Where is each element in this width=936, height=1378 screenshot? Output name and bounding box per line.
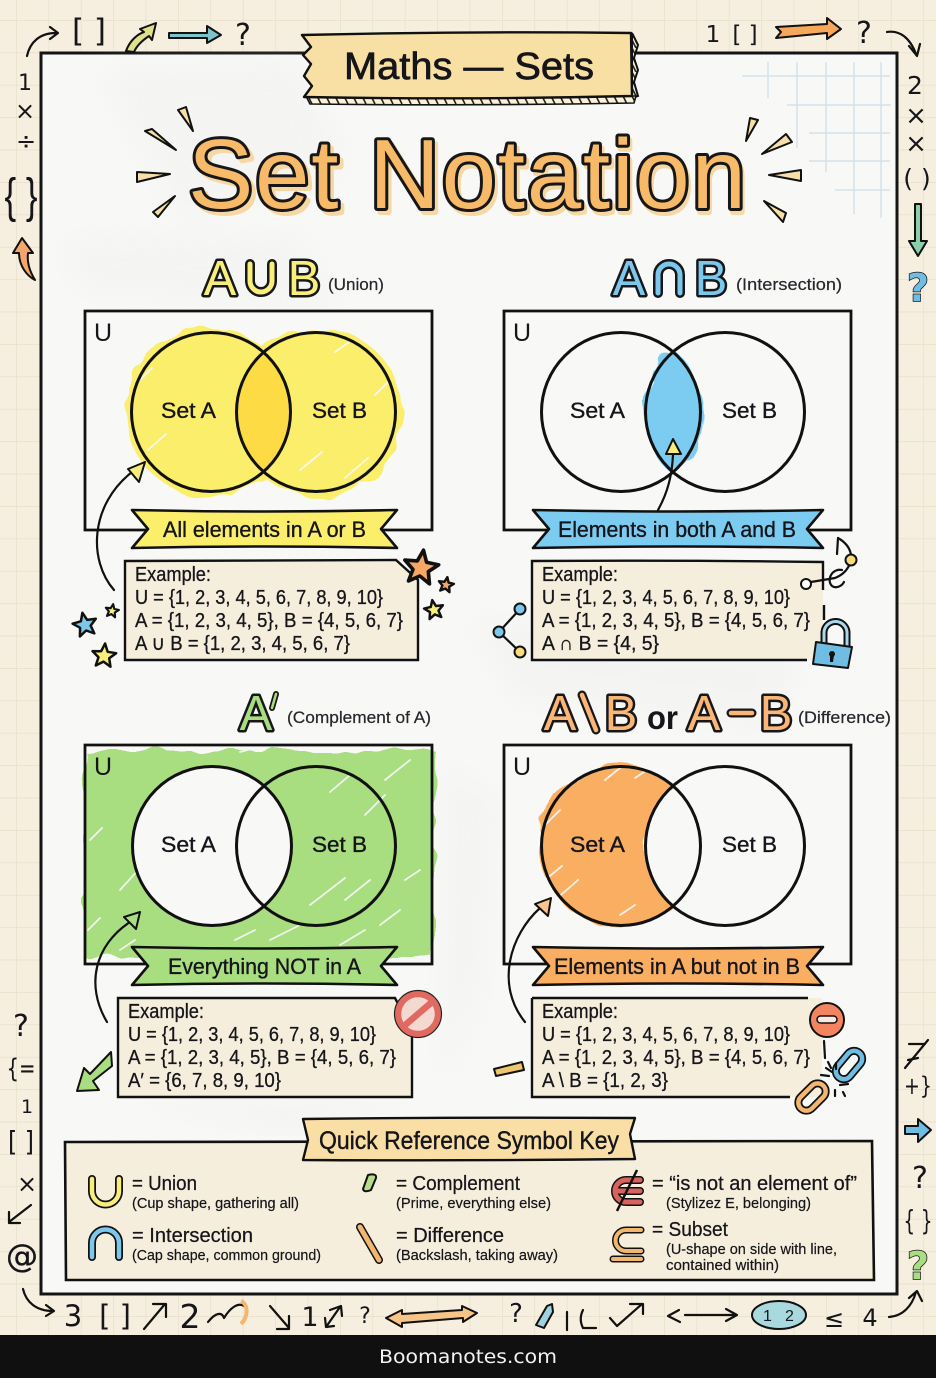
example box: union: U = {1, 2, 3, 4, 5, 6, 7, 8, 9, 10} bbox=[135, 587, 383, 609]
key: not an element of: = “is not an element of” bbox=[652, 1173, 857, 1195]
panel: difference venn bbox=[504, 745, 851, 1022]
panel: union venn: U bbox=[94, 319, 112, 347]
decoration: left margin symbols: 1 bbox=[18, 71, 32, 96]
union fill bbox=[125, 328, 402, 496]
decoration: left margin symbols bbox=[4, 71, 38, 280]
decoration: lower left margin symbols: @ bbox=[6, 1237, 38, 1275]
icon: network nodes left bbox=[494, 604, 526, 658]
example box: difference: A \ B = {1, 2, 3} bbox=[542, 1070, 668, 1092]
panel: difference venn: Set A bbox=[570, 832, 625, 857]
key: union: = Union bbox=[132, 1173, 197, 1195]
decoration: bottom margin symbols bbox=[23, 1289, 922, 1336]
example box: union: A ∪ B = {1, 2, 3, 4, 5, 6, 7} bbox=[135, 633, 350, 655]
footer bar bbox=[0, 1335, 936, 1378]
example box: intersection: Example: bbox=[542, 564, 618, 586]
panel: complement venn: U bbox=[94, 753, 112, 781]
example box: intersection: A = {1, 2, 3, 4, 5}, B = {4, 5, 6, 7} bbox=[542, 610, 810, 632]
heading: A minus B bbox=[544, 687, 891, 741]
decoration: bottom margin symbols: [ ] bbox=[99, 1299, 131, 1333]
decoration: lower left margin symbols: ? bbox=[13, 1009, 29, 1044]
key: not an element of: (Stylizez E, belonging) bbox=[666, 1195, 811, 1212]
heading: A intersection B: B bbox=[695, 252, 727, 306]
caption: Intersection: (Intersection) bbox=[736, 275, 842, 294]
decoration: top right margin symbols: 1 bbox=[706, 22, 720, 48]
decoration: lower left margin symbols bbox=[6, 1009, 38, 1275]
corner grid decoration bbox=[742, 62, 891, 218]
panel: difference venn: Set B bbox=[722, 832, 777, 857]
panel: intersection venn bbox=[504, 311, 851, 548]
key title banner: Quick Reference Symbol Key bbox=[319, 1127, 619, 1155]
footer bar: Boomanotes.com bbox=[379, 1346, 557, 1368]
key: union bbox=[92, 1173, 299, 1212]
panel: complement venn: Set A bbox=[161, 832, 216, 857]
arrow: difference pointer bbox=[509, 898, 551, 1022]
key: subset: = Subset bbox=[652, 1219, 728, 1241]
decoration: bottom margin symbols: ? bbox=[359, 1304, 371, 1329]
example box: intersection: U = {1, 2, 3, 4, 5, 6, 7, 8, 9, 10} bbox=[542, 587, 790, 609]
decoration: right margin symbols: ( ) bbox=[903, 164, 931, 193]
banner: Maths — Sets bbox=[302, 32, 638, 105]
decoration: top left margin symbols: [ ] bbox=[72, 13, 106, 49]
icon: network nodes right bbox=[801, 538, 856, 589]
heading: A complement: A bbox=[240, 687, 273, 741]
heading: A minus B: A bbox=[544, 687, 577, 741]
heading: A minus B: B bbox=[760, 687, 792, 741]
decoration: top right margin symbols bbox=[706, 16, 920, 56]
decoration: bottom margin symbols: 1 bbox=[763, 1308, 772, 1325]
example box: intersection bbox=[532, 561, 824, 660]
icon: stars around union example bbox=[71, 548, 455, 667]
heading: A intersection B bbox=[613, 252, 842, 306]
decoration: lower right margin symbols: ? bbox=[912, 1161, 928, 1196]
example box: difference bbox=[532, 998, 822, 1097]
decoration: bottom margin symbols: 2 bbox=[785, 1308, 794, 1325]
heading: A union B: A bbox=[204, 252, 237, 306]
example box: intersection: A ∩ B = {4, 5} bbox=[542, 633, 659, 655]
example box: complement bbox=[118, 998, 412, 1097]
decoration: bottom margin symbols: 1 bbox=[301, 1302, 319, 1333]
decoration: right margin symbols: 2 bbox=[907, 71, 923, 100]
example box: complement: Example: bbox=[128, 1001, 204, 1023]
banner: Maths — Sets: Maths — Sets bbox=[344, 46, 594, 88]
intersection fill bbox=[643, 349, 703, 475]
icon: tan dash bbox=[494, 1062, 524, 1076]
decoration: bottom margin symbols: 3 bbox=[64, 1299, 82, 1333]
decoration: lower right margin symbols bbox=[904, 1040, 932, 1288]
decoration: lower left margin symbols: {= bbox=[6, 1054, 36, 1084]
key: complement: (Prime, everything else) bbox=[396, 1195, 551, 1212]
key: not an element of bbox=[615, 1170, 857, 1212]
decoration: left margin symbols: ÷ bbox=[16, 127, 36, 155]
panel: union venn: Set A bbox=[161, 398, 216, 423]
decoration: right margin symbols: × bbox=[905, 129, 927, 159]
caption: Complement of A: (Complement of A) bbox=[287, 708, 431, 727]
panel: complement venn: Set B bbox=[312, 832, 367, 857]
ribbon: elements in both bbox=[533, 510, 823, 548]
example box: complement: A = {1, 2, 3, 4, 5}, B = {4, 5, 6, 7} bbox=[128, 1047, 396, 1069]
example box: union bbox=[125, 560, 418, 660]
difference fill bbox=[539, 765, 673, 927]
decoration: lower left margin symbols: [ ] bbox=[8, 1125, 34, 1158]
ribbon: all elements bbox=[132, 510, 397, 548]
example box: union: A = {1, 2, 3, 4, 5}, B = {4, 5, 6, 7} bbox=[135, 610, 403, 632]
key: difference: (Backslash, taking away) bbox=[396, 1247, 558, 1264]
arrow: complement pointer bbox=[95, 912, 140, 1022]
decoration: top left margin symbols bbox=[27, 13, 251, 56]
icon: broken chain bbox=[795, 1048, 865, 1114]
key: complement: = Complement bbox=[396, 1173, 520, 1195]
panel: intersection venn: Set A bbox=[570, 398, 625, 423]
panel: difference venn: U bbox=[513, 753, 531, 781]
heading: A union B bbox=[204, 252, 384, 306]
heading: A complement bbox=[240, 687, 431, 741]
decoration: lower left margin symbols: × bbox=[17, 1170, 37, 1198]
decoration: top right margin symbols: [ ] bbox=[732, 22, 758, 48]
icon: title burst left bbox=[137, 107, 193, 217]
key title banner bbox=[303, 1118, 635, 1160]
caption: Difference: (Difference) bbox=[798, 708, 891, 727]
decoration: lower left margin symbols: 1 bbox=[21, 1096, 33, 1118]
panel: intersection venn: Set B bbox=[722, 398, 777, 423]
ribbon: everything not in A bbox=[132, 947, 397, 985]
example box: complement: A′ = {6, 7, 8, 9, 10} bbox=[128, 1070, 281, 1092]
panel: intersection venn: U bbox=[513, 319, 531, 347]
decoration: bottom margin symbols: 4 bbox=[862, 1304, 878, 1332]
example box: union: Example: bbox=[135, 564, 211, 586]
ribbon: elements in both: Elements in both A and B bbox=[558, 517, 796, 542]
decoration: left margin symbols: { } bbox=[4, 170, 38, 223]
icon: green arrow bbox=[77, 1052, 112, 1091]
heading: A minus B: or bbox=[647, 699, 678, 736]
ribbon: in A but not in B: Elements in A but not in B bbox=[554, 954, 800, 979]
key: subset: (U-shape on side with line, bbox=[666, 1241, 837, 1258]
ribbon: everything not in A: Everything NOT in A bbox=[168, 954, 361, 979]
key: difference: = Difference bbox=[396, 1225, 504, 1247]
arrow: intersection pointer bbox=[658, 439, 681, 510]
decoration: left margin symbols: × bbox=[15, 97, 35, 125]
decoration: bottom margin symbols: 2 bbox=[180, 1297, 200, 1336]
decoration: right margin symbols bbox=[903, 71, 931, 310]
heading: A union B: B bbox=[288, 252, 320, 306]
decoration: bottom margin symbols: ≤ bbox=[824, 1305, 844, 1333]
example box: difference: Example: bbox=[542, 1001, 618, 1023]
key: complement bbox=[363, 1173, 551, 1212]
panel: union venn bbox=[85, 311, 432, 548]
decoration: right margin symbols: × bbox=[905, 101, 927, 131]
key: subset bbox=[613, 1219, 837, 1274]
icon: padlock bbox=[813, 621, 852, 668]
decoration: top left margin symbols: ? bbox=[235, 18, 251, 53]
ribbon: in A but not in B bbox=[533, 947, 823, 985]
decoration: bottom margin symbols: ? bbox=[509, 1299, 523, 1329]
panel: union venn: Set B bbox=[312, 398, 367, 423]
icon: minus sign bbox=[810, 1003, 844, 1058]
example box: difference: A = {1, 2, 3, 4, 5}, B = {4, 5, 6, 7} bbox=[542, 1047, 810, 1069]
key: intersection bbox=[92, 1225, 321, 1264]
heading: A minus B: A bbox=[688, 687, 721, 741]
panel: quick reference symbol key bbox=[65, 1118, 874, 1280]
title: Set Notation: Set Notation bbox=[188, 119, 746, 229]
heading: A intersection B: A bbox=[613, 252, 646, 306]
example box: difference: U = {1, 2, 3, 4, 5, 6, 7, 8, 9, 10} bbox=[542, 1024, 790, 1046]
key: union: (Cup shape, gathering all) bbox=[132, 1195, 299, 1212]
panel: complement venn bbox=[84, 745, 434, 1022]
arrow: union pointer bbox=[97, 462, 145, 590]
key: difference bbox=[360, 1225, 558, 1264]
complement fill bbox=[84, 750, 434, 958]
decoration: right margin symbols: ? bbox=[907, 266, 929, 310]
caption: Union: (Union) bbox=[328, 275, 384, 294]
ribbon: all elements: All elements in A or B bbox=[163, 517, 366, 542]
example box: complement: U = {1, 2, 3, 4, 5, 6, 7, 8, 9, 10} bbox=[128, 1024, 376, 1046]
decoration: lower right margin symbols: ? bbox=[907, 1244, 929, 1288]
icon: no sign bbox=[394, 990, 442, 1038]
key: intersection: = Intersection bbox=[132, 1225, 253, 1247]
heading: A minus B: B bbox=[605, 687, 637, 741]
key: subset: contained within) bbox=[666, 1257, 779, 1274]
key: intersection: (Cap shape, common ground) bbox=[132, 1247, 321, 1264]
title: Set Notation: Set Notation bbox=[192, 123, 748, 233]
decoration: top right margin symbols: ? bbox=[856, 16, 872, 51]
icon: title burst right bbox=[746, 118, 801, 222]
